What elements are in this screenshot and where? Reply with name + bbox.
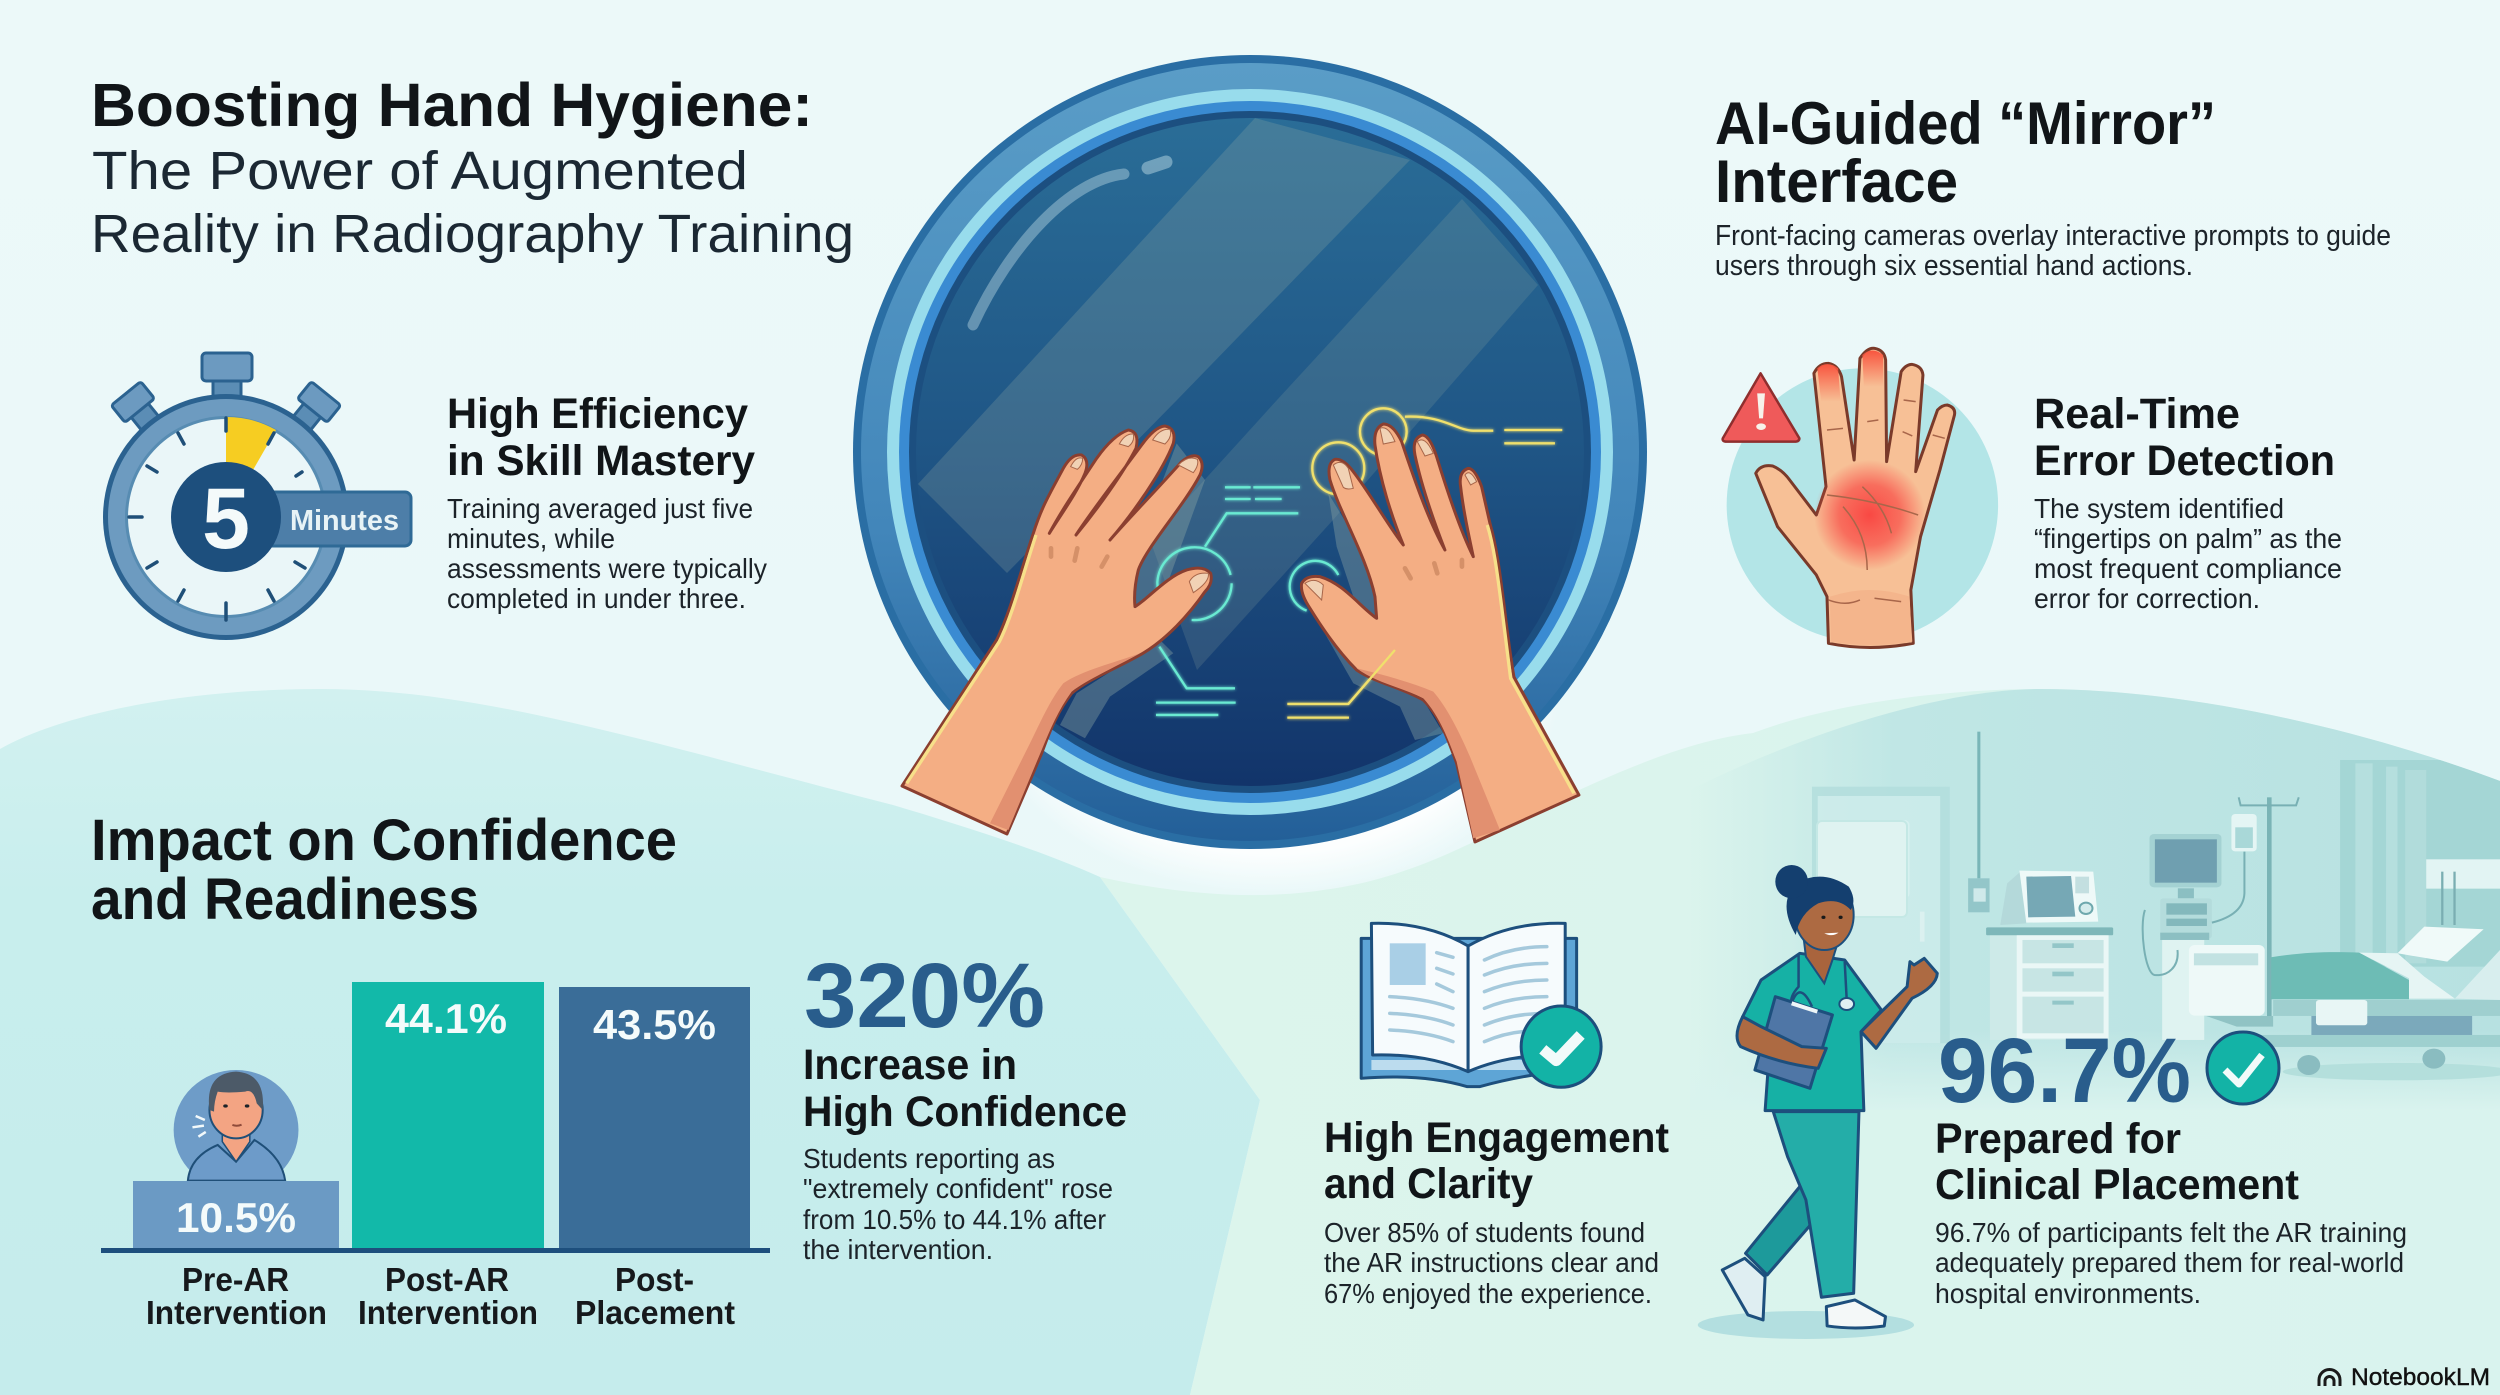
text block: prepared for clinical placement: 96.7% of participants felt the AR training <box>1935 1217 2407 1248</box>
text block: prepared for clinical placement: Clinical Placement <box>1935 1161 2299 1209</box>
mirror frame <box>853 55 1647 849</box>
curtain <box>2340 760 2500 967</box>
wall outlet <box>1968 732 1990 912</box>
icon: stopwatch: 5 <box>202 471 250 567</box>
title <box>91 71 854 264</box>
text block: high efficiency <box>447 390 767 614</box>
panel: confidence and readiness background <box>0 689 1260 1395</box>
bar: pre-ar: 10.5% <box>176 1194 296 1241</box>
stat: 320 percent: "extremely confident" rose <box>803 1173 1113 1204</box>
text block: real-time error detection: error for correction. <box>2034 583 2260 614</box>
vital monitor and iv <box>2143 797 2299 1040</box>
text block: high efficiency: completed in under three. <box>447 583 746 614</box>
text block: prepared for clinical placement: Prepared for <box>1935 1115 2181 1163</box>
hospital room background <box>1755 689 2500 1090</box>
text block: high efficiency: Training averaged just five <box>447 493 753 524</box>
stat: 320 percent: Students reporting as <box>803 1143 1055 1174</box>
hand shadows on glass <box>1060 443 1443 740</box>
text block: real-time error detection: “fingertips on palm” as the <box>2034 523 2342 554</box>
door <box>1812 787 1950 1043</box>
bar labels: Placement <box>575 1294 735 1331</box>
text block: prepared for clinical placement: hospital environments. <box>1935 1278 2201 1309</box>
text block: high efficiency: minutes, while <box>447 523 615 554</box>
bar: post-ar: 44.1% <box>385 995 507 1042</box>
stat: 320 percent: the intervention. <box>803 1234 993 1265</box>
bar: post-ar <box>352 982 544 1248</box>
text block: real-time error detection: The system identified <box>2034 493 2284 524</box>
left hand <box>902 426 1211 834</box>
text block: real-time error detection: most frequent compliance <box>2034 553 2342 584</box>
ar overlay teal <box>1156 487 1338 715</box>
panel: engagement and placement background <box>1100 689 2500 1395</box>
icon: open book with check <box>1361 923 1601 1087</box>
icon: check badge <box>2207 1032 2279 1104</box>
stat: 320 percent: High Confidence <box>803 1088 1127 1136</box>
text block: real-time error detection: Error Detection <box>2034 437 2335 485</box>
heading: impact on confidence and readiness <box>91 808 677 932</box>
bar labels: Post-AR <box>385 1261 509 1298</box>
check badge <box>1521 1006 1601 1087</box>
notebooklm watermark: NotebookLM <box>2351 1364 2490 1391</box>
text block: high engagement: 67% enjoyed the experience. <box>1324 1278 1652 1309</box>
text block: high engagement: the AR instructions clear and <box>1324 1247 1659 1278</box>
window on hospital wall <box>1817 821 1907 917</box>
bar: pre-ar <box>133 1181 339 1248</box>
heading: impact on confidence and readiness: Impact on Confidence <box>91 808 677 873</box>
title: Reality in Radiography Training <box>91 204 854 264</box>
text block: high efficiency: High Efficiency <box>447 390 748 438</box>
heading: ai-guided mirror interface <box>1715 90 2391 282</box>
icon: hand with error hotspots <box>1723 348 1998 647</box>
bar labels: Intervention <box>358 1294 538 1331</box>
icon: anxious student <box>174 1070 298 1190</box>
text block: high engagement <box>1324 1114 1669 1309</box>
bar labels: Post- <box>615 1261 694 1298</box>
bar labels: Pre-AR <box>182 1261 289 1298</box>
text block: high engagement: High Engagement <box>1324 1114 1669 1162</box>
bar chart <box>101 982 770 1331</box>
stat: 320 percent <box>803 945 1127 1265</box>
text block: high efficiency: in Skill Mastery <box>447 437 755 485</box>
mirror illustration <box>853 55 1647 849</box>
text block: prepared for clinical placement <box>1935 1115 2407 1309</box>
right hand <box>1301 424 1579 842</box>
heading: ai-guided mirror interface: Front-facing cameras overlay interactive prompts to guide <box>1715 220 2391 252</box>
text block: high efficiency: assessments were typically <box>447 553 767 584</box>
bar labels: Intervention <box>146 1294 327 1331</box>
stat: 320 percent: 320% <box>804 945 1045 1047</box>
bar labels <box>146 1261 735 1331</box>
heading: ai-guided mirror interface: Interface <box>1715 148 1958 215</box>
text block: high engagement: and Clarity <box>1324 1160 1533 1208</box>
text block: real-time error detection: Real-Time <box>2034 390 2240 438</box>
heading: ai-guided mirror interface: AI-Guided “Mirror” <box>1715 90 2216 157</box>
heading: impact on confidence and readiness: and Readiness <box>91 867 479 932</box>
glow under mirror <box>980 485 1560 895</box>
heading: ai-guided mirror interface: users through six essential hand actions. <box>1715 250 2193 282</box>
title: Boosting Hand Hygiene: <box>91 71 813 139</box>
stat: 320 percent: Increase in <box>803 1041 1017 1089</box>
text block: high engagement: Over 85% of students found <box>1324 1217 1645 1248</box>
icon: stopwatch <box>103 353 411 640</box>
text block: real-time error detection <box>2034 390 2342 614</box>
bar: post-placement <box>559 987 750 1248</box>
stat: 320 percent: from 10.5% to 44.1% after <box>803 1204 1106 1235</box>
stat: 96.7 percent: 96.7% <box>1938 1020 2191 1122</box>
drawer cabinet with monitor <box>1986 871 2113 1040</box>
title: The Power of Augmented <box>92 141 748 201</box>
hospital bed <box>2189 859 2500 1080</box>
icon: stopwatch: Minutes <box>290 505 399 537</box>
mirror glass <box>916 118 1584 786</box>
illustration: walking nurse <box>1698 865 1937 1339</box>
text block: prepared for clinical placement: adequately prepared them for real-world <box>1935 1247 2404 1278</box>
bar: post-placement: 43.5% <box>593 1001 716 1048</box>
ar overlay yellow <box>1287 408 1562 718</box>
